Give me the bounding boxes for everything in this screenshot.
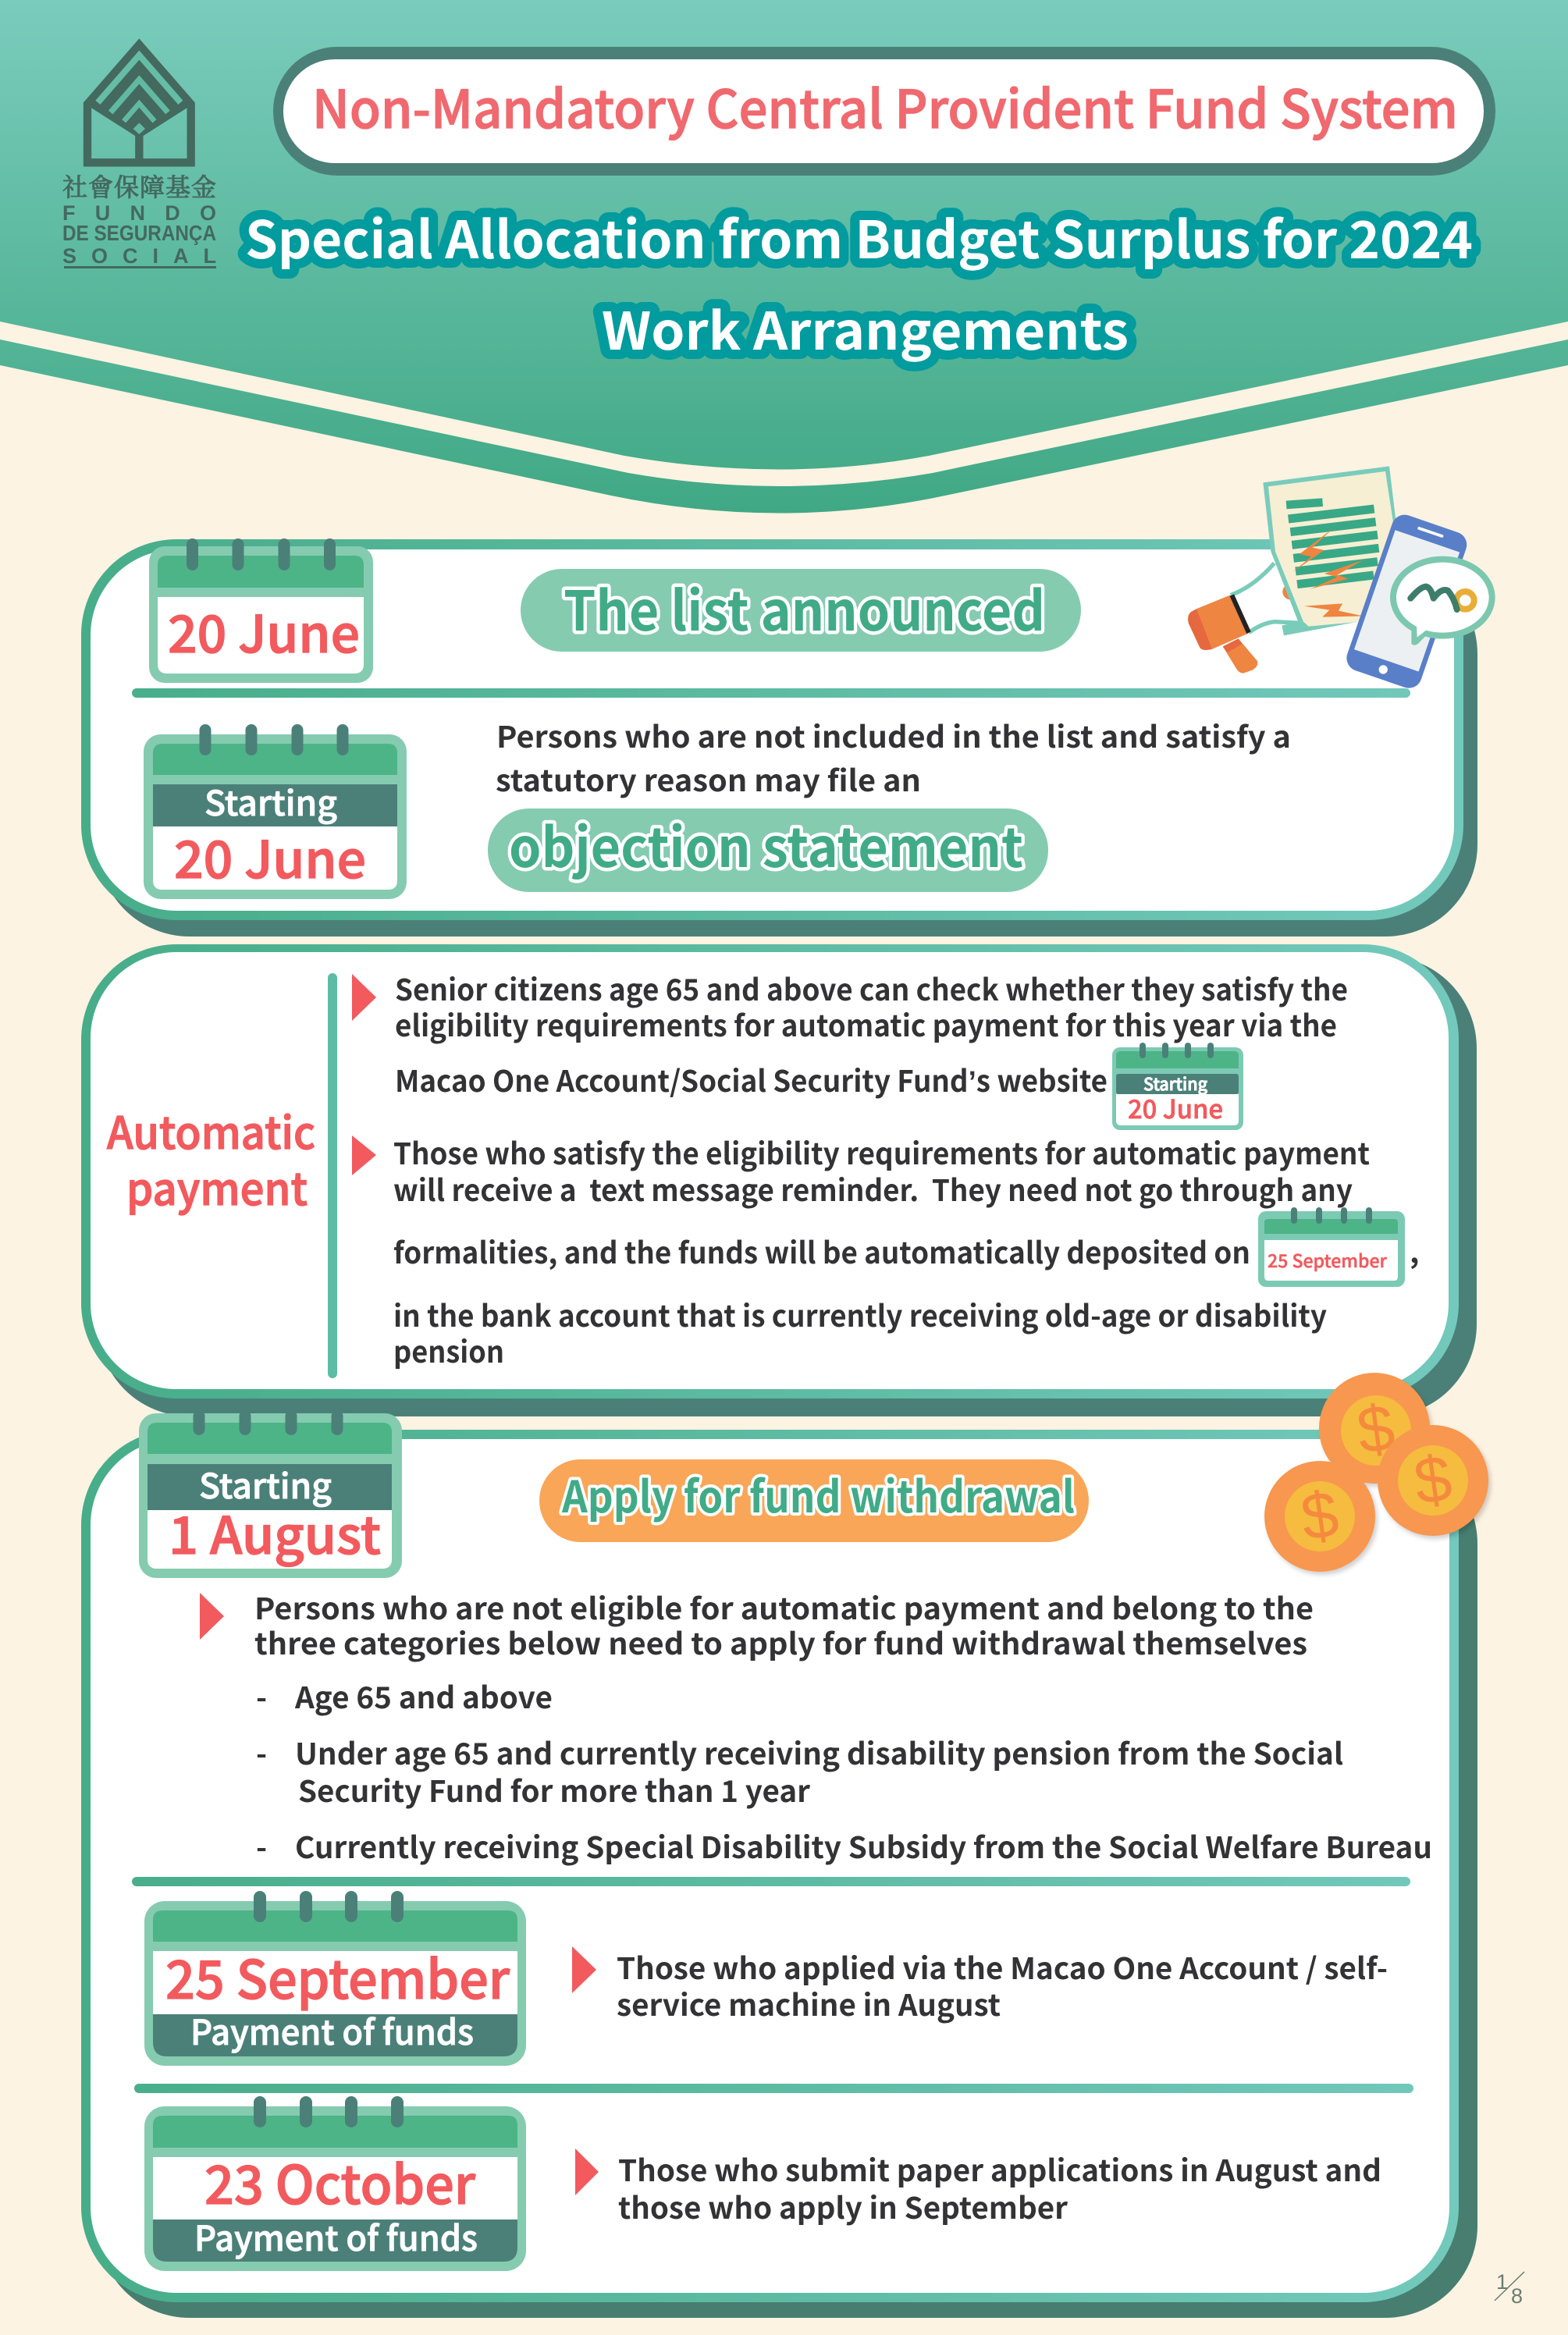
calendar: 25 September payment: 25 September (165, 1937, 510, 2014)
icon: three gold coins: $ (1296, 1477, 1343, 1555)
arrow: October payment (575, 2148, 599, 2195)
calendar: 25 September payment (144, 1891, 526, 2066)
calendar: 23 October payment: Payment of funds (194, 2211, 478, 2261)
text: eligibility: Persons who are not eligible for automatic payment and belong to the (254, 1585, 1314, 1628)
calendar: Starting 20 June: Starting (204, 776, 337, 826)
subtitle: Work Arrangements (602, 290, 1129, 365)
arrow: September payment (572, 1946, 596, 1993)
text: second point: pension (393, 1328, 504, 1371)
text: first point: eligibility requirements for automatic payment for this year via the (395, 1002, 1337, 1045)
logo: Fundo de Seguranca Social: FUNDO (62, 201, 216, 225)
icon: megaphone (1188, 562, 1301, 673)
calendar: Starting 20 June: 20 June (174, 819, 366, 894)
page number: 1 (1496, 2270, 1508, 2294)
arrow: eligibility (200, 1593, 224, 1640)
icon: three gold coins (1264, 1373, 1488, 1572)
pill: Apply for fund withdrawal (539, 1459, 1089, 1542)
panel: the list announced (81, 538, 1477, 936)
calendar: small 25 September: 25 September (1268, 1246, 1388, 1273)
text: September payment: Those who applied via the Macao One Account / self- (617, 1945, 1388, 1988)
list: three categories: Currently receiving Special Disability Subsidy from the Social Welfare Bureau (295, 1824, 1432, 1867)
page number (1495, 2270, 1524, 2308)
calendar: Starting 1 August (139, 1410, 402, 1578)
text: objection statement intro: Persons who are not included in the list and satisfy a (496, 713, 1291, 756)
heading: Automatic payment (107, 1098, 315, 1218)
text: objection statement intro (496, 713, 1291, 800)
text: second point (393, 1130, 1419, 1371)
text: second point: in the bank account that is currently receiving old-age or disability (393, 1292, 1327, 1335)
pill: Apply for fund withdrawal: Apply for fund withdrawal (561, 1462, 1075, 1526)
heading: Automatic payment: payment (126, 1154, 308, 1218)
text: eligibility: three categories below need to apply for fund withdrawal themselves (254, 1620, 1307, 1663)
list: three categories: - (256, 1674, 267, 1717)
text: eligibility (254, 1585, 1314, 1663)
icon: document (1263, 466, 1397, 635)
text: October payment: those who apply in September (618, 2184, 1068, 2227)
text: second point: will receive a text message reminder. They need not go through any (393, 1167, 1353, 1210)
icon: speech bubble (1393, 560, 1492, 645)
logo: Fundo de Seguranca Social: DE SEGURANÇA (62, 221, 216, 245)
calendar: 25 September payment: Payment of funds (190, 2005, 474, 2055)
text: October payment: Those who submit paper applications in August and (618, 2147, 1381, 2190)
pill: objection statement: objection statement (509, 805, 1023, 883)
page number: 8 (1511, 2284, 1523, 2308)
text: second point: , (1410, 1228, 1419, 1271)
calendar: 20 June: 20 June (168, 593, 360, 668)
text: September payment: service machine in August (617, 1981, 1001, 2024)
calendar: small Starting 20 June: Starting (1143, 1071, 1207, 1096)
arrow: second point (352, 1136, 376, 1175)
list: three categories: Under age 65 and currently receiving disability pension from the Social (295, 1730, 1343, 1773)
illustration: megaphone, document and phone (1188, 466, 1492, 691)
calendar: small 25 September (1258, 1207, 1405, 1287)
text: second point: Those who satisfy the eligibility requirements for automatic payment (393, 1130, 1370, 1173)
arrow: first point (352, 974, 376, 1021)
pill: The list announced: The list announced (564, 568, 1045, 647)
calendar: Starting 20 June (144, 724, 407, 899)
list: three categories: Security Fund for more than 1 year (298, 1768, 810, 1811)
text: first point: Macao One Account/Social Security Fund’s website (395, 1057, 1108, 1100)
text: October payment (618, 2147, 1381, 2227)
calendar: Starting 1 August: Starting (199, 1459, 332, 1509)
calendar: 23 October payment: 23 October (204, 2142, 475, 2219)
calendar: small Starting 20 June (1112, 1043, 1243, 1130)
icon: phone (1343, 511, 1470, 691)
text: September payment (617, 1945, 1388, 2024)
title pill (273, 47, 1495, 176)
heading: Automatic payment: Automatic (107, 1098, 315, 1162)
text: objection statement intro: statutory reason may file an (496, 757, 921, 800)
text: first point (395, 966, 1348, 1100)
list: three categories: - (256, 1730, 267, 1773)
subtitle (245, 199, 1473, 365)
list: three categories: - (256, 1824, 267, 1867)
icon: three gold coins: $ (1410, 1441, 1456, 1519)
calendar: small Starting 20 June: 20 June (1128, 1089, 1223, 1126)
calendar: 20 June (149, 538, 373, 683)
subtitle: Special Allocation from Budget Surplus for 2024 (245, 199, 1473, 274)
text: second point: formalities, and the funds will be automatically deposited on (393, 1229, 1250, 1272)
logo: Fundo de Seguranca Social: 社會保障基金 (62, 168, 216, 204)
list: three categories (256, 1674, 1432, 1867)
logo: Fundo de Seguranca Social (62, 38, 216, 268)
text: first point: Senior citizens age 65 and above can check whether they satisfy the (395, 966, 1348, 1009)
logo: Fundo de Seguranca Social: SOCIAL (62, 244, 216, 268)
title pill: Non-Mandatory Central Provident Fund System (312, 68, 1458, 144)
icon: three gold coins: $ (1353, 1390, 1399, 1468)
header background (0, 0, 1568, 514)
panel: apply for fund withdrawal (81, 1410, 1477, 2318)
list: three categories: Age 65 and above (294, 1674, 553, 1717)
panel: automatic payment (81, 944, 1477, 1416)
calendar: 23 October payment (144, 2096, 526, 2271)
calendar: Starting 1 August: 1 August (169, 1494, 381, 1569)
